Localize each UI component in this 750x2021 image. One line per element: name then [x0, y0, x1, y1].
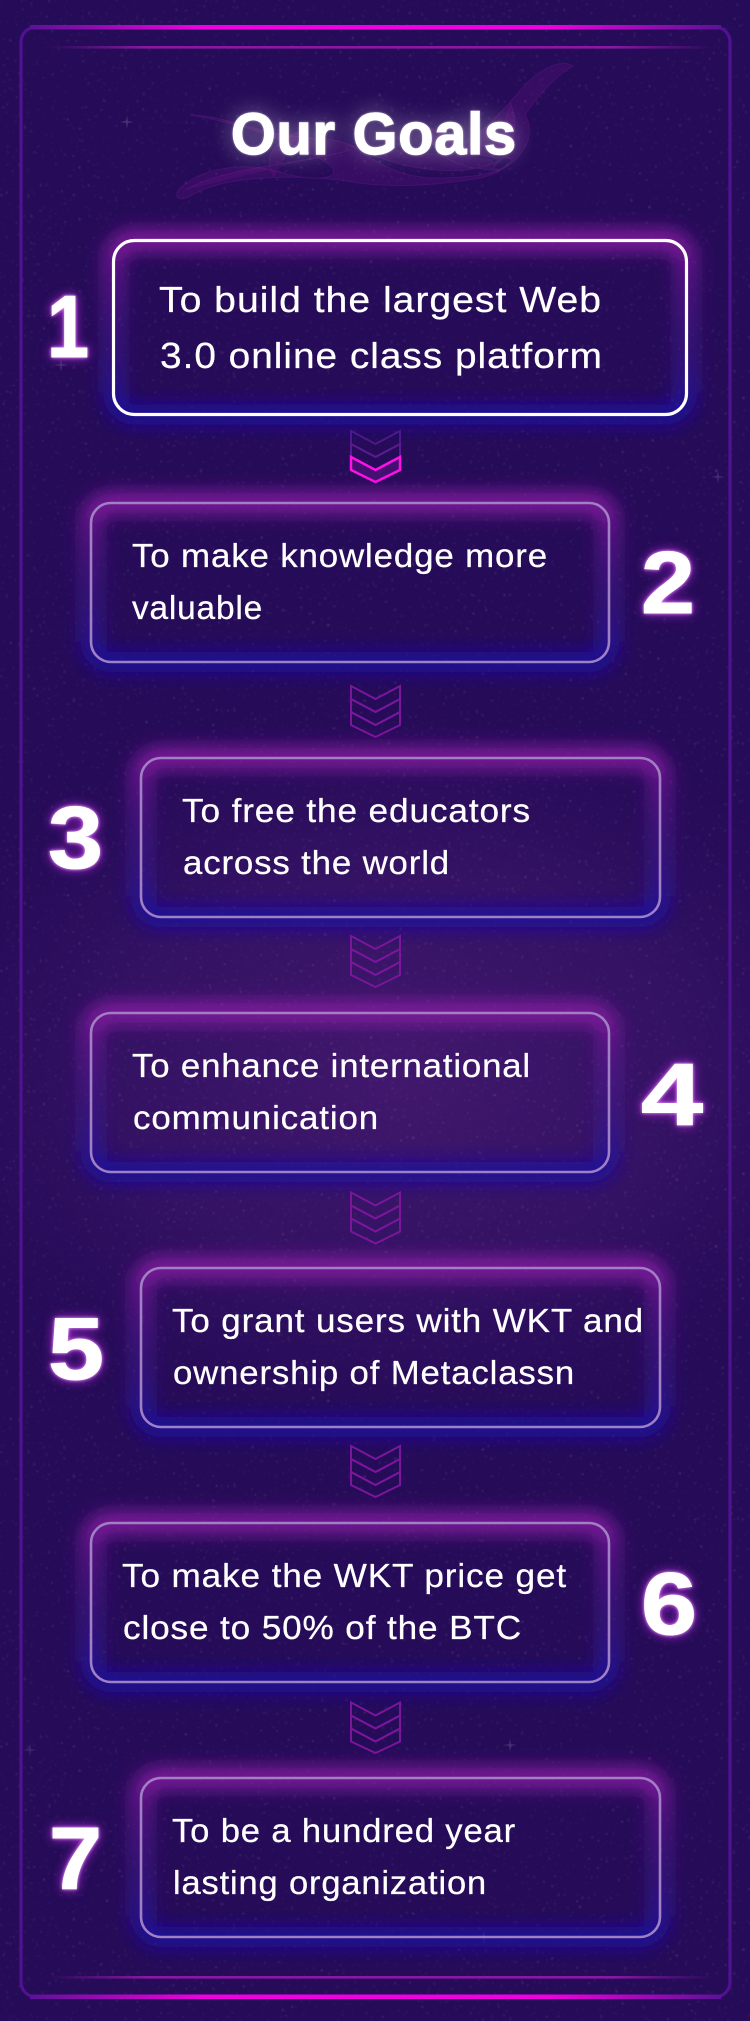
number 3: 3 [48, 788, 103, 887]
title: Our Goals [231, 102, 517, 167]
goal 1 panel: To build the largest Web [159, 279, 602, 320]
goal 7 panel: lasting organization [173, 1864, 487, 1901]
arrow 6 [351, 1702, 400, 1753]
goal 2 panel: To make knowledge more [132, 537, 548, 574]
goal 5 panel [141, 1268, 660, 1427]
goal 7 panel: To be a hundred year [172, 1812, 516, 1849]
goal 2 panel [91, 503, 609, 662]
goal 1 panel: 3.0 online class platform [160, 335, 603, 376]
decorative smoke wisp behind title [177, 63, 573, 199]
number 7: 7 [49, 1809, 102, 1908]
goal 4 panel [91, 1013, 609, 1172]
arrow 2 [351, 686, 400, 737]
arrow 4 [351, 1192, 400, 1244]
number 6: 6 [641, 1554, 697, 1653]
goal 3 panel [141, 758, 660, 917]
goal 3 panel: across the world [183, 844, 450, 881]
number 5: 5 [48, 1299, 104, 1398]
goal 6 panel: close to 50% of the BTC [123, 1609, 522, 1646]
goal 1 panel [114, 240, 686, 414]
goal 5 panel: To grant users with WKT and [172, 1302, 644, 1339]
arrow 3 [351, 936, 400, 987]
goal 6 panel [91, 1523, 609, 1682]
goal 4 panel: To enhance international [132, 1047, 531, 1084]
goal 5 panel: ownership of Metaclassn [173, 1354, 575, 1391]
number 4: 4 [641, 1045, 703, 1144]
number 2: 2 [641, 533, 695, 632]
goal 2 panel: valuable [132, 589, 263, 626]
arrow 5 [351, 1446, 400, 1497]
number 1: 1 [47, 277, 89, 376]
goal 6 panel: To make the WKT price get [122, 1557, 567, 1594]
arrow 1 [351, 431, 400, 482]
goal 7 panel [141, 1778, 660, 1937]
goal 3 panel: To free the educators [182, 792, 531, 829]
goal 4 panel: communication [133, 1099, 379, 1136]
